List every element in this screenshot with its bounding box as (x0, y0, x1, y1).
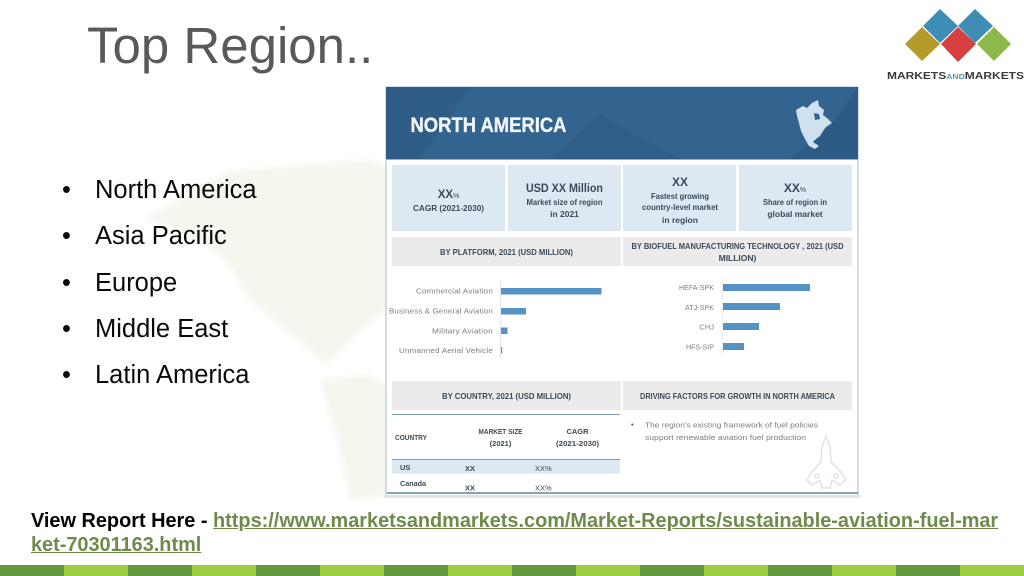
bullet: Latin America: Latin America (95, 361, 250, 389)
table: by country: XX (465, 484, 475, 492)
view report link: View Report Here - https://www.marketsandmarkets.com/Market-Reports/sustainable-aviation-fuel-mar (31, 510, 998, 532)
title: Top Region.. (87, 17, 373, 74)
bullet: Europe: • (62, 269, 71, 297)
section heading: by platform: BY PLATFORM, 2021 (USD MILLION) (440, 247, 573, 257)
table: by country: (2021-2030) (556, 439, 600, 448)
logo: MarketsandMarkets (887, 9, 1024, 82)
section heading: by biofuel technology: MILLION) (719, 253, 757, 263)
heading: North America: NORTH AMERICA (410, 114, 566, 137)
footer stripe band (0, 565, 1024, 576)
bullet: Latin America: • (62, 361, 71, 389)
bar chart: by biofuel technology (679, 277, 810, 356)
icon: aircraft outline (807, 436, 846, 488)
text block: driving factors: • (631, 420, 634, 429)
bullet list of regions (62, 176, 257, 389)
stat box: share of region: global market (767, 209, 823, 219)
stat box: fastest growing (623, 165, 736, 231)
stat box: CAGR: CAGR (2021-2030) (413, 203, 484, 213)
text block: driving factors (631, 420, 818, 442)
bullet: Europe: Europe (95, 269, 177, 297)
bullet: Middle East: • (62, 315, 71, 343)
section heading: by country (392, 381, 621, 410)
section heading: driving factors: DRIVING FACTORS FOR GROWTH IN NORTH AMERICA (640, 391, 835, 401)
table: by country: Canada (400, 479, 427, 488)
section heading: driving factors (623, 381, 852, 410)
bar chart: by biofuel technology: CHJ (699, 322, 714, 332)
bar chart: by platform: Business & General Aviation (389, 306, 493, 316)
bar chart: by biofuel technology: HEFA-SPK (679, 283, 714, 292)
stat box: market size: in 2021 (550, 209, 579, 219)
text block: driving factors: support renewable aviation fuel production (645, 433, 806, 442)
table: by country: COUNTRY (395, 433, 427, 442)
bar chart: by biofuel technology: ATJ-SPK (685, 303, 714, 312)
bullet: North America: • (62, 176, 71, 204)
table: by country: MARKET SIZE (478, 427, 522, 436)
section heading: by platform (392, 237, 621, 266)
panel: North America infographic (384, 86, 860, 498)
stat box: CAGR: XX% (438, 189, 459, 201)
bar chart: by platform: Military Aviation (432, 326, 493, 336)
table: by country: CAGR (566, 427, 589, 436)
stat box: market size (508, 165, 621, 231)
section heading: by biofuel technology (623, 237, 852, 266)
view report link (31, 510, 998, 556)
bar chart: by biofuel technology: HFS-SIP (686, 342, 714, 352)
bar chart: by platform: Unmanned Aerial Vehicle (399, 346, 493, 355)
stat box: CAGR (392, 165, 505, 231)
stat box: fastest growing: in region (662, 215, 698, 225)
icon: North America map (796, 100, 832, 149)
bar chart: by platform (389, 281, 602, 359)
stat box: share of region (739, 165, 852, 231)
stat box: share of region: XX% (784, 181, 806, 195)
section heading: by country: BY COUNTRY, 2021 (USD MILLION) (442, 391, 571, 401)
stat box: fastest growing: XX (672, 175, 688, 189)
bullet: North America: North America (95, 176, 257, 204)
table: by country: US (400, 463, 410, 472)
stat box: fastest growing: Fastest growing (651, 191, 709, 201)
view report link: ket-70301163.html (31, 534, 201, 556)
text block: driving factors: The region's existing framework of fuel policies (645, 420, 818, 430)
stat box: share of region: Share of region in (763, 197, 827, 207)
table: by country: (2021) (490, 439, 512, 448)
stat box: market size: Market size of region (526, 197, 602, 207)
bullet: Asia Pacific: Asia Pacific (95, 222, 227, 250)
table: by country: XX% (535, 464, 552, 473)
bullet: Asia Pacific: • (62, 222, 71, 250)
section heading: by biofuel technology: BY BIOFUEL MANUFACTURING TECHNOLOGY , 2021 (USD (632, 241, 844, 251)
header banner (386, 87, 858, 160)
logo wordmark: MARKETS ANDMARKETS (887, 70, 1024, 82)
stat box: fastest growing: country-level market (642, 202, 718, 212)
icon: logo diamonds (905, 9, 1011, 62)
table: by country (387, 414, 858, 493)
bar chart: by platform: Commercial Aviation (416, 286, 493, 296)
table: by country: XX% (535, 484, 552, 492)
stat box: market size: USD XX Million (526, 181, 603, 195)
bullet: Middle East: Middle East (95, 315, 228, 343)
table: by country: XX (465, 464, 475, 473)
